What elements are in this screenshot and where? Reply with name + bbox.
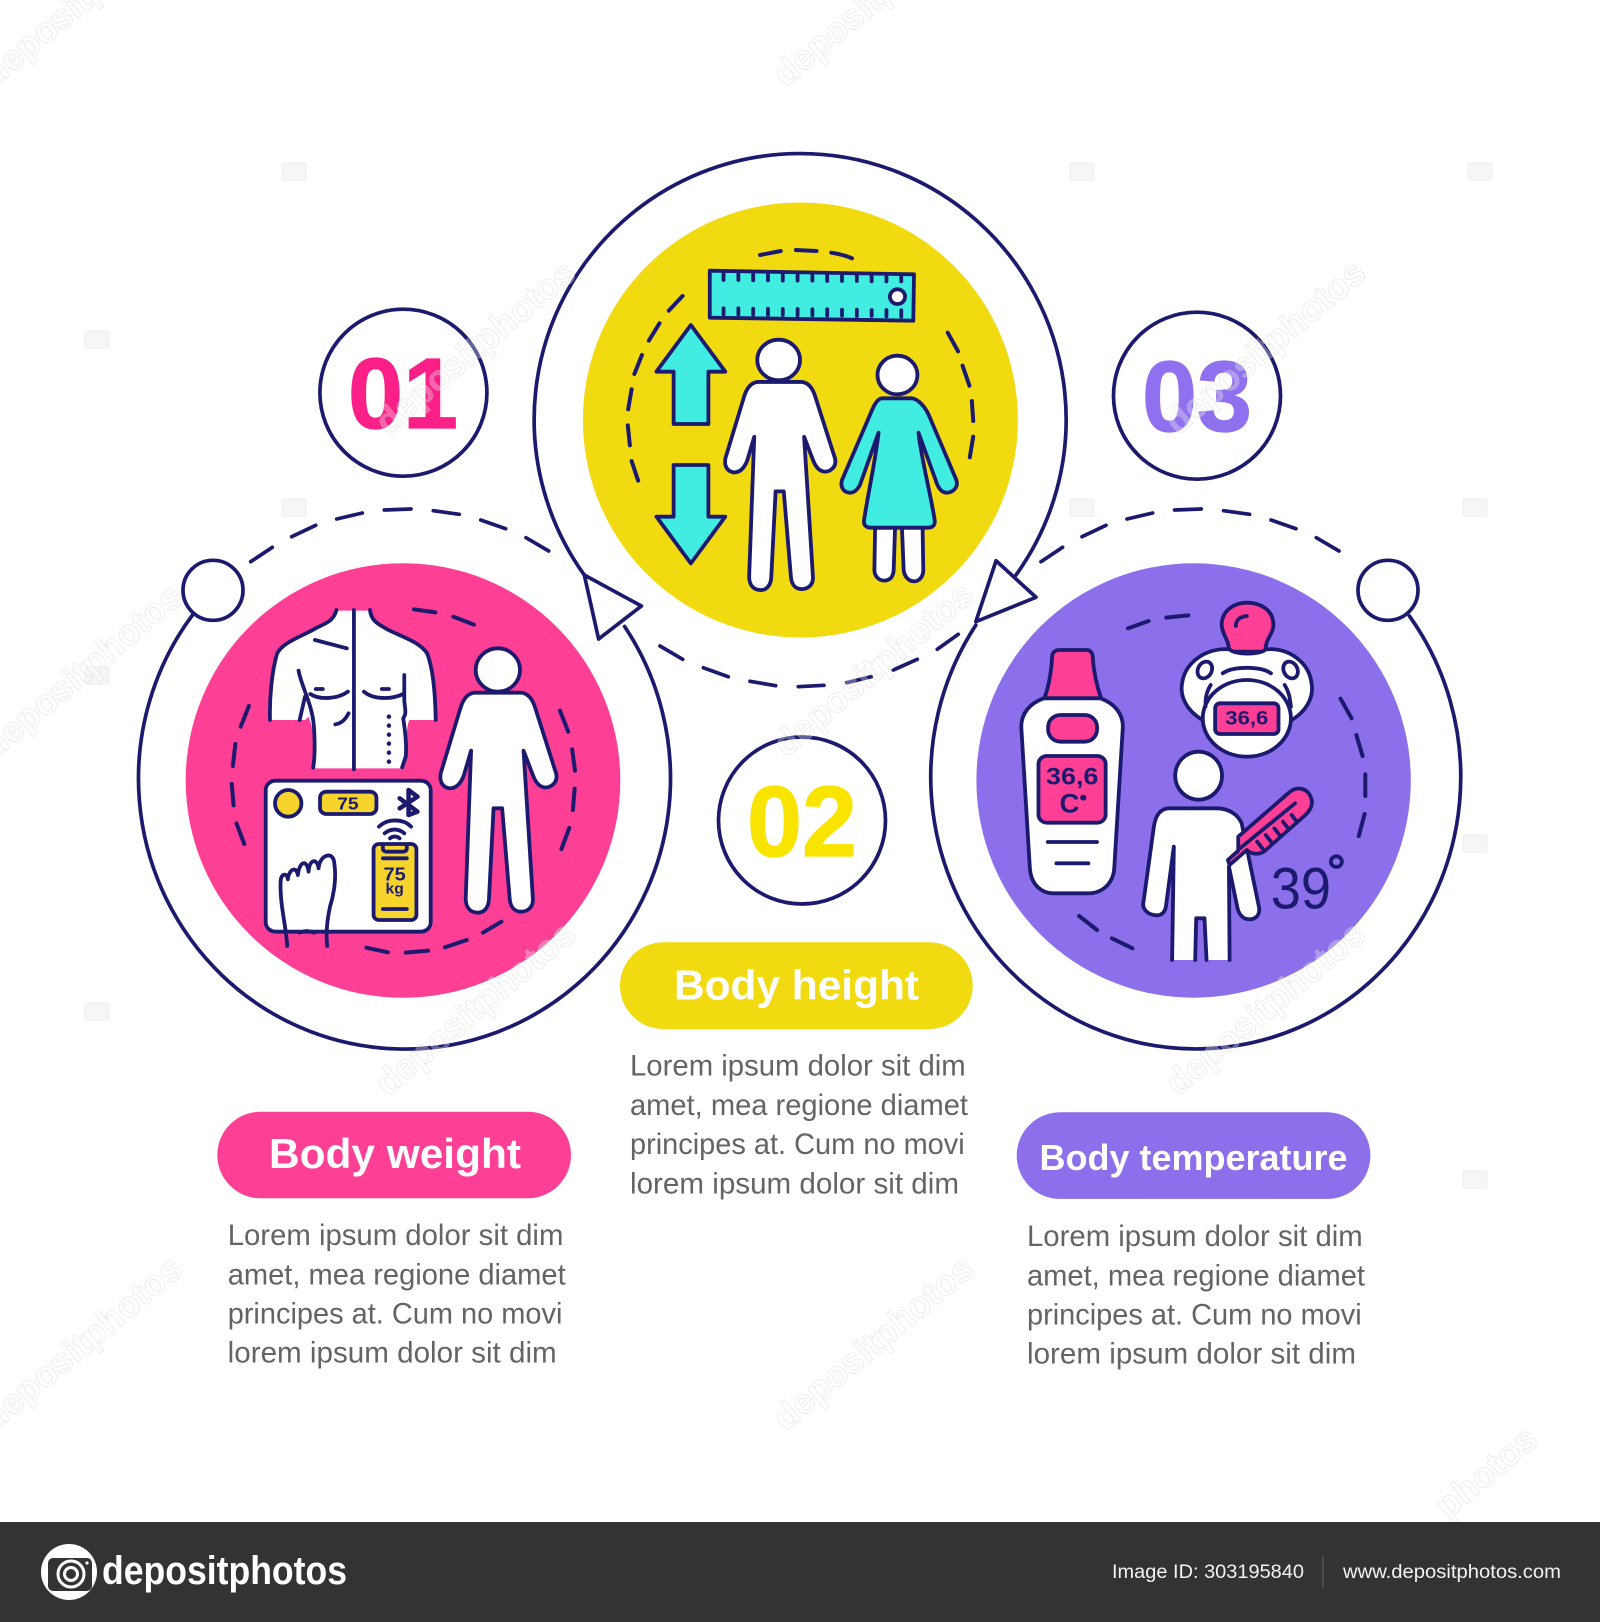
outer ring: step 2 with arrow (534, 154, 1066, 687)
icon: smart scale: 75 (337, 793, 359, 813)
panel: body height label (620, 942, 973, 1029)
icon: pacifier thermometer: 36,6 (1225, 708, 1268, 729)
footer bar: www.depositphotos.com (1342, 1561, 1561, 1583)
text block: body height description: lorem ipsum dolor sit dim (630, 1167, 959, 1200)
footer bar: Image ID: 303195840 (1112, 1561, 1304, 1583)
icon: depositphotos logo camera (41, 1544, 97, 1600)
panel: body weight label (217, 1112, 571, 1198)
panel: body height label: Body height (674, 961, 919, 1008)
text block: body weight description: Lorem ipsum dolor sit dim (228, 1219, 563, 1252)
watermark text: depositphotos (367, 251, 583, 442)
icon: woman (841, 356, 957, 581)
footer bar: depositphotos (102, 1549, 347, 1593)
text block: body temperature description: lorem ipsum dolor sit dim (1027, 1338, 1356, 1371)
text block: body weight description: principes at. Cum no movi (228, 1297, 562, 1330)
outer ring: step 3 with start node (931, 509, 1461, 1049)
watermark text: depositphotos (765, 573, 981, 764)
icon: dashed inner ring (628, 250, 973, 481)
panel: body weight label: Body weight (269, 1130, 521, 1177)
number badge 01 (320, 309, 487, 476)
panel: body temperature label: Body temperature (1040, 1137, 1348, 1178)
text block: body temperature description: principes at. Cum no movi (1027, 1298, 1362, 1331)
icon: dashed inner ring (232, 609, 575, 953)
text block: body height description: amet, mea regione diamet (630, 1089, 968, 1122)
watermark text: photos (1427, 1418, 1545, 1526)
icon: ear thermometer bottle: C (1060, 788, 1079, 819)
text block: body weight description: lorem ipsum dolor sit dim (228, 1337, 557, 1370)
watermark text: depositphotos (1157, 912, 1373, 1103)
icon: ear thermometer bottle: 36,6 (1046, 764, 1098, 790)
outer ring: step 1 with arrow and start node (138, 509, 670, 1049)
icon: down arrow (656, 465, 725, 563)
number badge 02: 02 (747, 766, 857, 878)
icon: ruler (710, 271, 914, 321)
icon: person (440, 648, 557, 913)
text block: body temperature description: amet, mea regione diamet (1027, 1259, 1365, 1292)
icon: smart scale: kg (385, 881, 404, 897)
text block: body weight description (228, 1219, 566, 1370)
icon: smart scale (266, 781, 431, 946)
icon: man (725, 340, 835, 590)
text block: body weight description: amet, mea regione diamet (228, 1258, 566, 1291)
icons: body weight (232, 609, 575, 953)
number badge 02 (718, 737, 886, 904)
icon: pacifier thermometer (1182, 603, 1312, 757)
text block: body temperature description: Lorem ipsum dolor sit dim (1027, 1220, 1363, 1253)
number badge 01: 01 (348, 338, 458, 450)
watermark text: depositphotos (367, 912, 583, 1103)
footer bar (0, 1522, 1600, 1622)
panel: body temperature label (1017, 1112, 1370, 1199)
icon: child with thermometer: 39 (1271, 857, 1331, 921)
text block: body temperature description (1027, 1220, 1365, 1371)
number badge 03: 03 (1142, 341, 1252, 453)
watermark text: depositphotos (1157, 251, 1373, 442)
circle panel backgrounds: weight, height, temperature (186, 202, 1411, 998)
icon: child with thermometer (1143, 752, 1342, 960)
icons: body temperature (1021, 603, 1365, 960)
text block: body height description: principes at. Cum no movi (630, 1128, 965, 1161)
icon: up arrow (656, 325, 725, 424)
icon: torso (270, 610, 436, 769)
watermark text: depositphotos (765, 1247, 981, 1438)
number badge 03 (1114, 312, 1280, 479)
icon: smart scale: 75 (384, 864, 406, 885)
watermark camera marks (85, 163, 1492, 1188)
icon: dashed inner ring (1079, 615, 1365, 948)
icons: body height (628, 250, 973, 590)
text block: body height description (630, 1050, 968, 1200)
icon: ear thermometer bottle (1021, 650, 1123, 893)
text block: body height description: Lorem ipsum dolor sit dim (630, 1050, 966, 1083)
